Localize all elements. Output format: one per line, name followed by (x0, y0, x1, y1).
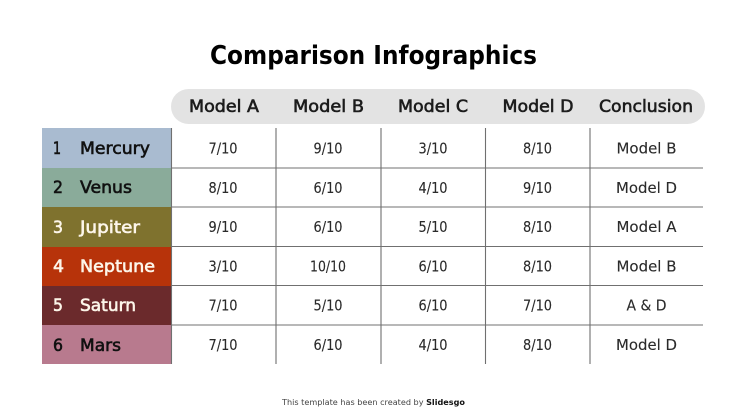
row 6 values: 8/10 (523, 336, 552, 354)
row label: Mercury (42, 128, 171, 168)
row label: Mars (42, 325, 171, 364)
row 3 values: 5/10 (418, 218, 448, 236)
row 6 values: 6/10 (314, 336, 342, 354)
row 3 values: 6/10 (314, 218, 342, 236)
panel: planet rows (42, 128, 171, 364)
table values (208, 140, 677, 354)
row 4 values: Model B (616, 258, 676, 276)
row label: Neptune: Neptune (80, 257, 155, 276)
row 2 values (208, 179, 677, 197)
row 6 values: 4/10 (418, 336, 448, 354)
row label: Neptune: 4 (53, 257, 64, 276)
row 2 values: 9/10 (523, 179, 552, 197)
row label: Mars: Mars (80, 336, 121, 355)
row 5 values: 6/10 (418, 296, 448, 314)
row 4 values: 10/10 (310, 258, 346, 276)
row label: Mars: 6 (53, 336, 63, 355)
row 3 values: 8/10 (523, 218, 552, 236)
row 1 values: Model B (616, 140, 676, 158)
row label: Venus: Venus (80, 178, 132, 197)
row 2 values: 6/10 (314, 179, 342, 197)
row 5 values: 5/10 (314, 296, 342, 314)
row label: Neptune (42, 247, 171, 286)
header: Model A: Model A (189, 97, 260, 116)
row 5 values (208, 296, 666, 314)
row label: Mercury: Mercury (80, 139, 150, 158)
row 3 values (208, 218, 677, 236)
row 5 values: 7/10 (208, 296, 238, 314)
row 5 values: 7/10 (523, 296, 552, 314)
row 1 values: 9/10 (314, 140, 342, 158)
row 4 values (208, 258, 676, 276)
row label: Venus: 2 (53, 178, 63, 197)
row 6 values: Model D (616, 336, 677, 354)
title: Comparison Infographics (210, 41, 537, 71)
row label: Mercury: 1 (53, 139, 61, 158)
row 2 values: 8/10 (208, 179, 238, 197)
row label: Jupiter: Jupiter (79, 218, 140, 237)
row label: Saturn: 5 (53, 296, 63, 315)
row 4 values: 8/10 (523, 258, 552, 276)
row 1 values: 8/10 (523, 140, 552, 158)
row label: Saturn: Saturn (80, 296, 136, 315)
panel: table header pill (171, 89, 705, 124)
row 3 values: 9/10 (208, 218, 238, 236)
header: Model D: Model D (502, 97, 574, 116)
row 1 values: 3/10 (418, 140, 448, 158)
table grid lines (171, 128, 703, 364)
header: Model C: Model C (398, 97, 468, 116)
row 4 values: 6/10 (418, 258, 448, 276)
footer credit: This template has been created by Slidesgo (281, 398, 465, 407)
row 1 values: 7/10 (208, 140, 238, 158)
header: Conclusion: Conclusion (599, 97, 693, 116)
row 6 values: 7/10 (208, 336, 238, 354)
row 2 values: 4/10 (418, 179, 448, 197)
header: Model B: Model B (293, 97, 364, 116)
row label: Saturn (42, 286, 171, 325)
row 6 values (208, 336, 677, 354)
row label: Venus (42, 168, 171, 207)
row 1 values (208, 140, 676, 158)
row label: Jupiter: 3 (53, 218, 63, 237)
row 3 values: Model A (616, 218, 677, 236)
row label: Jupiter (42, 207, 171, 247)
row 4 values: 3/10 (208, 258, 238, 276)
row 5 values: A & D (626, 296, 666, 314)
row 2 values: Model D (616, 179, 677, 197)
